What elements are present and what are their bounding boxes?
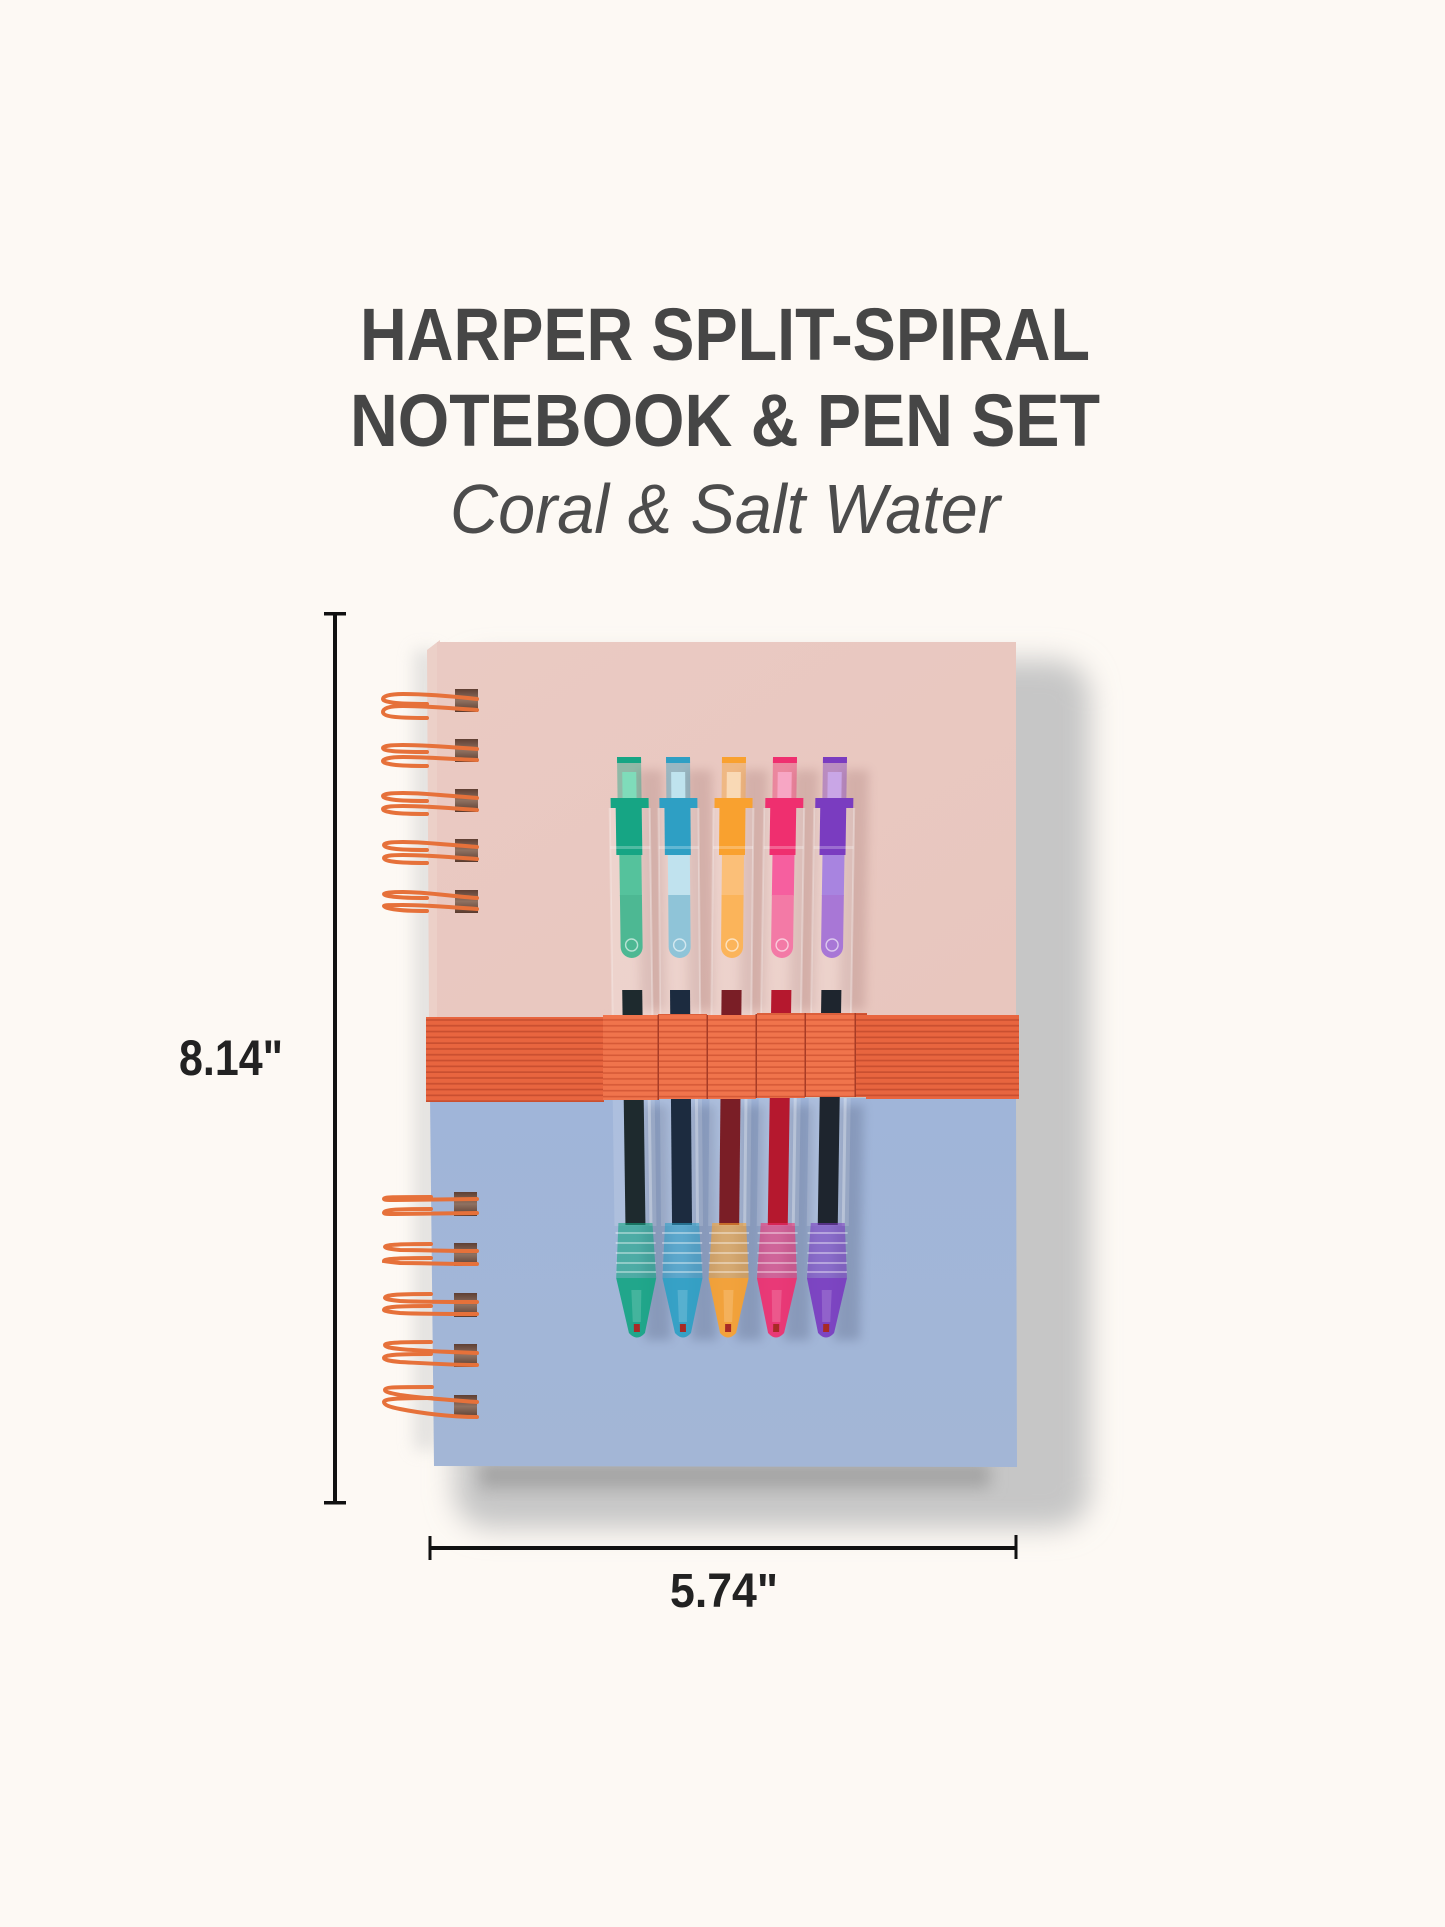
lower binding holes [454,1192,477,1418]
height dimension line [324,612,346,1504]
pen: pink [755,757,819,1340]
pen loops [603,1013,867,1100]
pink upper cover [437,642,1016,1020]
flat band right [866,1015,1019,1099]
back cover spine edge [427,640,440,1017]
width label: 5.74" [670,1565,778,1618]
flat band left [426,1017,604,1102]
pen: blue [657,757,717,1340]
pens [608,757,869,1340]
pen: orange [707,757,768,1340]
pen: purple [805,757,869,1340]
width dimension line [428,1535,1018,1560]
upper spiral wire [383,694,477,911]
title [350,293,1100,462]
notebook [383,640,1019,1467]
height label: 8.14" [179,1030,283,1086]
lower spiral wire [384,1197,477,1417]
blue lower cover [430,1098,1017,1467]
upper binding holes [455,689,478,913]
title: HARPER SPLIT-SPIRAL [360,293,1090,376]
elastic band [426,1013,1019,1102]
notebook drop shadow [414,650,1090,1528]
pen: green [608,757,671,1340]
title: NOTEBOOK & PEN SET [350,379,1100,462]
subtitle: Coral & Salt Water [450,470,1003,548]
